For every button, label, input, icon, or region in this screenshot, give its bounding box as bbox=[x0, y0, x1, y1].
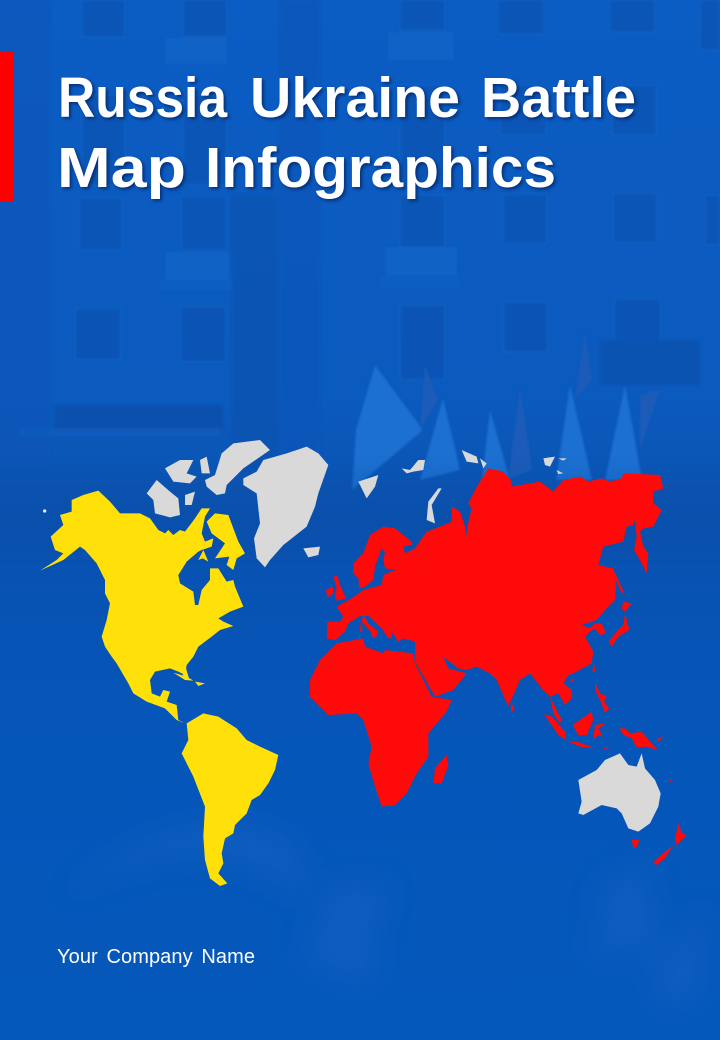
map: Europe, Asia and Africa in red bbox=[310, 468, 687, 865]
accent bar bbox=[0, 51, 14, 201]
title: Ukraine bbox=[250, 66, 460, 130]
title: Map bbox=[57, 136, 186, 200]
company name: Your Company Name bbox=[57, 946, 255, 968]
title bbox=[57, 66, 636, 200]
title: Infographics bbox=[205, 136, 556, 200]
map: Americas in yellow bbox=[40, 491, 278, 886]
title: Battle bbox=[481, 66, 636, 130]
world map bbox=[40, 440, 687, 886]
map: Arctic islands and Greenland in grey bbox=[147, 440, 328, 567]
title: Russia bbox=[58, 66, 228, 130]
map: Australia and Arctic islands in grey bbox=[358, 450, 661, 832]
